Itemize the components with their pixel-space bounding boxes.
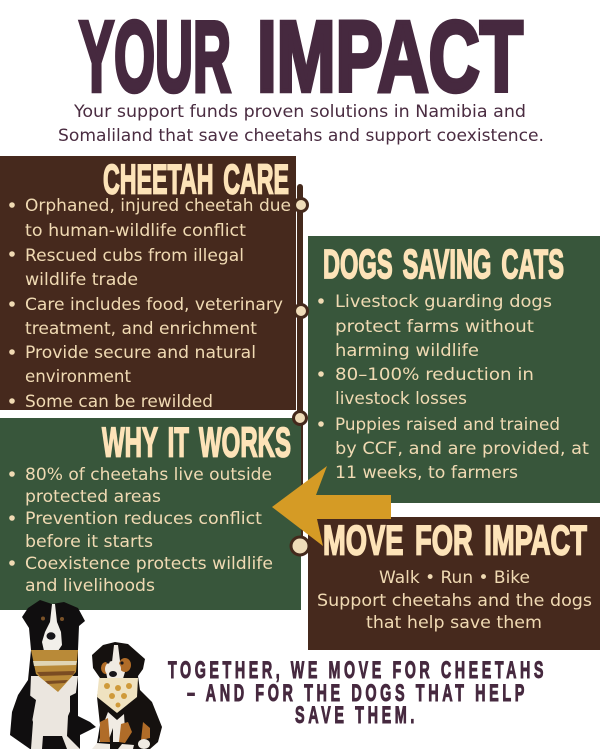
- bullet list: dogs saving cats: Puppies raised and trained: [335, 415, 560, 434]
- bullet list: dogs saving cats: protect farms without: [335, 317, 535, 336]
- bullet list: dogs saving cats: harming wildlife: [335, 341, 479, 360]
- title: YOUR: [79, 1, 231, 113]
- bullet list: dogs saving cats: [318, 292, 590, 482]
- bullet list: cheetah care: Care includes food, veterinary: [25, 295, 283, 314]
- panel: move for impact: [308, 516, 600, 650]
- bullet list: why it works: before it starts: [25, 532, 153, 551]
- text: move for impact: Support cheetahs and the dogs: [317, 591, 592, 610]
- bullet list: cheetah care: treatment, and enrichment: [25, 319, 258, 338]
- bullet list: why it works: protected areas: [25, 487, 161, 506]
- bullet list: why it works: Prevention reduces conflict: [25, 509, 263, 528]
- text: move for impact: [317, 568, 592, 632]
- bullet list: cheetah care: to human-wildlife conflict: [25, 221, 247, 240]
- closing message: [168, 657, 547, 729]
- bullet list: cheetah care: [9, 196, 291, 411]
- icon: puppy with bandana: [92, 642, 162, 749]
- text: move for impact: Walk • Run • Bike: [379, 568, 530, 587]
- text: move for impact: that help save them: [366, 613, 542, 632]
- bullet list: cheetah care: Some can be rewilded: [25, 392, 213, 411]
- title: [79, 1, 523, 113]
- bullet list: cheetah care: Rescued cubs from illegal: [25, 246, 244, 265]
- subtitle: Your support funds proven solutions in Namibia and: [73, 102, 526, 121]
- panel: cheetah care: [0, 156, 296, 411]
- panel: why it works: [0, 418, 301, 610]
- timeline connector: [297, 184, 303, 548]
- bullet list: why it works: and livelihoods: [25, 576, 155, 595]
- heading: cheetah care: CHEETAH CARE: [103, 156, 289, 202]
- bullet list: why it works: [9, 465, 273, 595]
- bullet list: dogs saving cats: 80–100% reduction in: [335, 365, 534, 384]
- bullet list: dogs saving cats: livestock losses: [335, 389, 467, 408]
- bullet list: why it works: Coexistence protects wildlife: [25, 554, 273, 573]
- bullet list: dogs saving cats: by CCF, and are provided, at: [335, 439, 590, 458]
- heading: why it works: WHY IT WORKS: [102, 418, 291, 466]
- bullet list: why it works: 80% of cheetahs live outside: [25, 465, 272, 484]
- subtitle: Somaliland that save cheetahs and support coexistence.: [58, 126, 544, 145]
- arrow: [272, 466, 391, 546]
- bullet list: cheetah care: Provide secure and natural: [25, 343, 256, 362]
- closing message: SAVE THEM.: [295, 702, 418, 729]
- bullet list: dogs saving cats: 11 weeks, to farmers: [335, 463, 518, 482]
- bullet list: cheetah care: environment: [25, 367, 132, 386]
- timeline markers: [291, 198, 309, 555]
- icon: adult dog with bandana: [10, 600, 96, 749]
- bullet list: cheetah care: Orphaned, injured cheetah due: [25, 196, 291, 215]
- panel: dogs saving cats: [308, 236, 600, 503]
- subtitle: [58, 102, 544, 145]
- bullet list: dogs saving cats: Livestock guarding dogs: [335, 292, 552, 311]
- bullet list: cheetah care: wildlife trade: [25, 270, 138, 289]
